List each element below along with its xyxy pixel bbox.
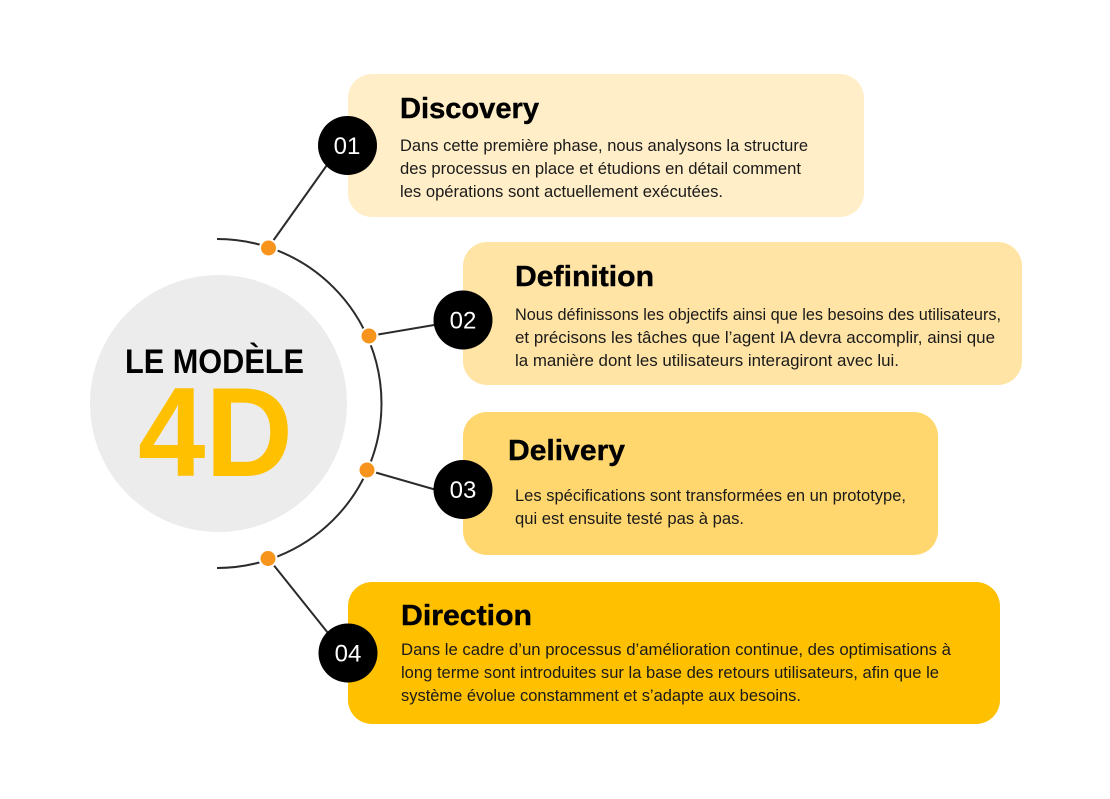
panel: Discovery xyxy=(348,74,864,217)
connector line 01 xyxy=(268,158,332,248)
body: Discovery: Dans cette première phase, nous analysons la structure xyxy=(400,137,808,155)
heading: Direction: Direction xyxy=(401,600,532,632)
body: Direction: Dans le cadre d’un processus d’amélioration continue, des optimisations à xyxy=(401,641,952,659)
badge 01 xyxy=(318,116,377,175)
body: Definition: la manière dont les utilisateurs interagiront avec lui. xyxy=(515,352,899,370)
node dot 02 xyxy=(360,328,378,344)
badge 03 xyxy=(434,460,492,519)
body: Delivery xyxy=(515,487,906,528)
body: Direction xyxy=(401,641,952,705)
connector line 02 xyxy=(369,324,440,336)
body: Discovery: des processus en place et étudions en détail comment xyxy=(400,160,801,178)
body: Definition: et précisons les tâches que l’agent IA devra accomplir, ainsi que xyxy=(515,329,995,347)
heading: Definition: Definition xyxy=(515,261,654,293)
central heading: LE MODÈLE xyxy=(125,343,304,381)
panel: Definition xyxy=(463,242,1022,385)
central circle: Le modèle 4D xyxy=(90,275,347,532)
badge 02 xyxy=(434,290,492,350)
connector line 04 xyxy=(268,558,332,638)
connector line 03 xyxy=(367,470,440,491)
badge 01: 01 xyxy=(334,133,360,160)
badge 02: 02 xyxy=(450,308,476,334)
badge 04: 04 xyxy=(335,640,361,668)
badge 04 xyxy=(318,624,378,682)
body: Definition xyxy=(515,306,1001,370)
body: Direction: long terme sont introduites sur la base des retours utilisateurs, afin que le xyxy=(401,664,939,682)
body: Discovery: les opérations sont actuellement exécutées. xyxy=(400,183,723,201)
node dot 04 xyxy=(260,550,276,567)
connector arc xyxy=(217,239,382,568)
node dot 01 xyxy=(260,240,277,256)
body: Direction: système évolue constamment et s’adapte aux besoins. xyxy=(401,687,801,705)
body: Delivery: Les spécifications sont transformées en un prototype, xyxy=(515,487,906,505)
heading: Discovery: Discovery xyxy=(400,93,539,125)
heading: Delivery: Delivery xyxy=(508,435,625,467)
body: Definition: Nous définissons les objectifs ainsi que les besoins des utilisateurs, xyxy=(515,306,1001,324)
node dot 03 xyxy=(358,462,376,478)
panel: Delivery xyxy=(463,412,938,555)
body: Discovery xyxy=(400,137,808,201)
badge 03: 03 xyxy=(450,477,476,504)
central 4D label: 4D xyxy=(138,361,293,503)
body: Delivery: qui est ensuite testé pas à pas. xyxy=(515,510,744,528)
panel: Direction xyxy=(348,582,1000,724)
